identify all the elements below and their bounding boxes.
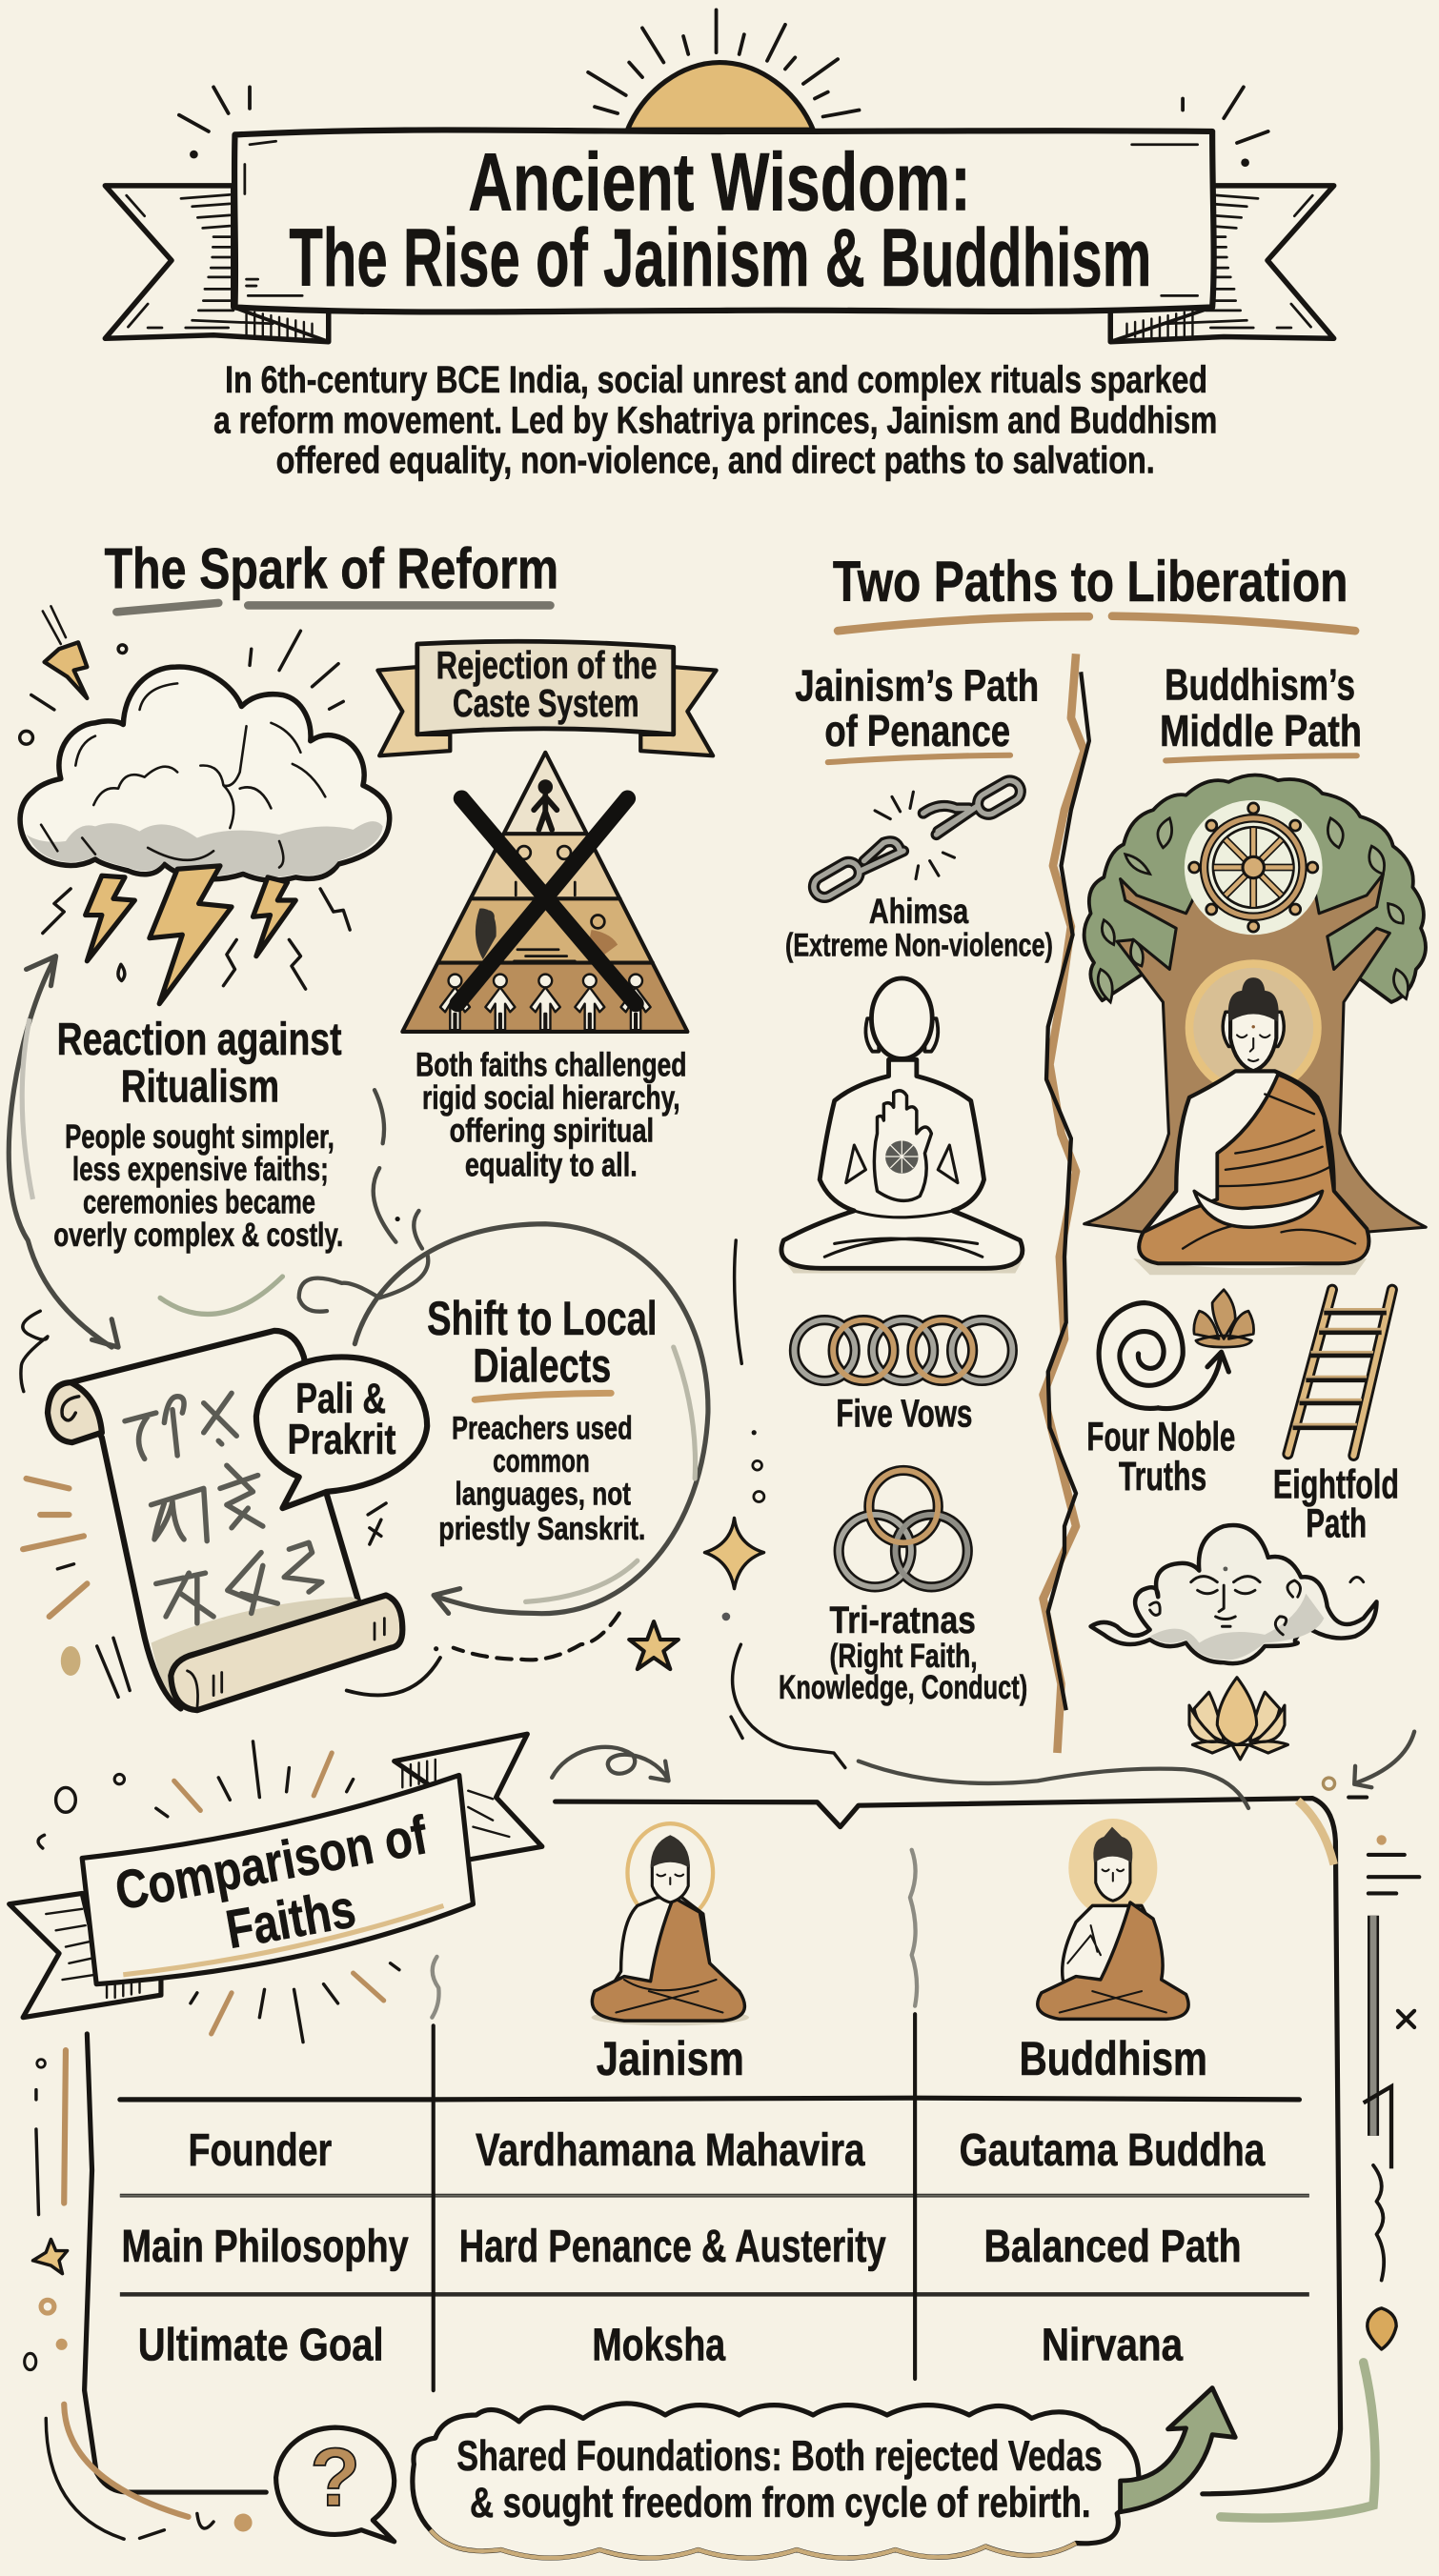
table text: founder row: Founder [189,2124,332,2176]
icon: five vows interlinked rings [794,1320,1012,1435]
text: both faiths challenged: Both faiths challenged [415,1047,687,1084]
callout: shared foundations cloud: & sought freedom from cycle of rebirth. [470,2479,1091,2526]
label: eightfold path: Path [1306,1500,1367,1545]
decorative rays around comparison banner [38,1741,399,2043]
icon: eightfold path ladder [1287,1290,1392,1456]
icon: five vows interlinked rings: Five Vows [836,1391,972,1435]
icon: tri-ratnas three rings [779,1470,1027,1706]
panel: shift to local dialects speech circle: Preachers used [452,1411,633,1447]
title text: Ancient Wisdom: [468,137,971,229]
label: four noble truths [1086,1415,1235,1499]
arrow: ritualism to scroll [9,956,118,1347]
banner: rejection of the caste system [377,641,717,755]
table text: main philosophy row: Balanced Path [984,2221,1242,2272]
column heading: Jainism's Path of Penance [795,660,1039,762]
icon: lotus [1189,1678,1287,1760]
table text: ultimate goal row: Nirvana [1042,2320,1184,2371]
text: reaction against ritualism: ceremonies became [83,1184,315,1221]
table text: ultimate goal row: Moksha [592,2320,726,2371]
panel: shift to local dialects speech circle [355,1224,708,1614]
figure: Jain meditator with hand symbol [781,978,1023,1273]
text: reaction against ritualism [53,1014,343,1254]
panel: shift to local dialects speech circle: common [493,1443,590,1479]
table text: main philosophy row: Hard Penance & Austerity [459,2221,886,2272]
title banner ribbon [105,130,1334,342]
column heading: Buddhism's Middle Path [1160,660,1362,760]
text: both faiths challenged: rigid social hierarchy, [422,1079,680,1117]
table text: founder row: Gautama Buddha [960,2124,1266,2176]
callout: shared foundations cloud: Shared Foundations: Both rejected Vedas [456,2432,1103,2480]
column heading: Buddhism's Middle Path: Buddhism’s [1165,660,1355,710]
label: Ahimsa: Ahimsa [869,891,968,931]
arrow: green upward arrow [1121,2388,1235,2512]
icon: scroll of scripts [48,1331,402,1710]
intro paragraph: a reform movement. Led by Kshatriya princes, Jainism and Buddhism [213,399,1217,441]
text: reaction against ritualism: People sought simpler, [65,1118,334,1156]
icon: rising sun with rays [179,10,1268,167]
figure: small Jain seated figure [592,1823,749,2025]
column heading: Jainism's Path of Penance: of Penance [824,706,1010,755]
text: both faiths challenged [415,1047,687,1184]
heading: The Spark of Reform: The Spark of Reform [104,535,558,600]
icon: tri-ratnas three rings: Tri-ratnas [829,1600,976,1641]
callout: shared foundations cloud [413,2404,1139,2558]
text: both faiths challenged: equality to all. [465,1147,638,1184]
text: both faiths challenged: offering spiritual [450,1113,654,1150]
column heading: Buddhism's Middle Path: Middle Path [1160,706,1362,755]
table text: ultimate goal row [138,2320,1184,2371]
table grid lines [120,1850,1309,2390]
icon: question speech bubble: ? [310,2432,360,2524]
comparison table frame [85,1761,1341,2494]
table text: founder row: Vardhamana Mahavira [476,2124,865,2176]
text: reaction against ritualism: less expensive faiths; [72,1151,329,1188]
banner: comparison of faiths [10,1734,542,2018]
table text: main philosophy row [122,2221,1242,2272]
icon: spiral to lotus (four noble truths) [1099,1290,1254,1409]
label: four noble truths: Truths [1119,1454,1206,1499]
figure: small Buddha seated figure [1038,1819,1188,2019]
speech bubble: Pali & Prakrit: Prakrit [288,1416,395,1463]
decorative marks around scroll [23,1240,845,1768]
title text [289,137,1151,304]
icon: question speech bubble [276,2427,395,2542]
text: reaction against ritualism: Reaction against [57,1014,342,1065]
table text: header row [597,2032,1207,2085]
figure: meditating Buddha [1133,960,1368,1275]
intro paragraph: offered equality, non-violence, and direct paths to salvation. [276,440,1155,482]
label: four noble truths: Four Noble [1086,1415,1235,1459]
icon: tri-ratnas three rings: (Right Faith, [829,1638,978,1675]
panel: shift to local dialects speech circle: languages, not [455,1477,631,1513]
label: eightfold path [1273,1462,1399,1545]
connector squiggles [21,1090,428,1392]
label: Ahimsa: (Extreme Non-violence) [785,928,1053,964]
divider between Jainism and Buddhism [1044,654,1089,1753]
table text: header row: Jainism [597,2032,744,2085]
illustration: bodhi tree with dharma wheel [1084,775,1426,1232]
intro paragraph [213,359,1217,482]
table text: ultimate goal row: Ultimate Goal [138,2320,384,2371]
text: reaction against ritualism: overly complex & costly. [53,1217,343,1254]
text: reaction against ritualism: Ritualism [121,1060,279,1112]
panel: shift to local dialects speech circle: Shift to Local [427,1292,657,1345]
banner: comparison of faiths: Faiths [221,1878,360,1961]
icon: tri-ratnas three rings: Knowledge, Conduct) [779,1669,1027,1706]
column heading: Jainism's Path of Penance: Jainism’s Path [795,660,1039,710]
pyramid with crossed-out caste hierarchy [402,753,687,1032]
table text: main philosophy row: Main Philosophy [122,2221,409,2272]
icon: broken chain [810,776,1024,901]
panel: shift to local dialects speech circle: priestly Sanskrit. [438,1511,645,1547]
panel: shift to local dialects speech circle: Dialects [473,1338,611,1392]
icon: storm cloud with lightning [20,606,390,1004]
decorative marks on right margin [1221,1732,1419,2518]
arrow: loop [552,1747,669,1781]
banner: rejection of the caste system: Caste System [453,681,639,725]
table text: founder row [189,2124,1266,2176]
intro paragraph: In 6th-century BCE India, social unrest and complex rituals sparked [225,359,1207,401]
label: Ahimsa [785,891,1053,964]
banner: comparison of faiths: Comparison of [111,1804,433,1922]
speech bubble: Pali & Prakrit [256,1357,427,1508]
decorative marks on left margin [25,2050,253,2539]
banner: rejection of the caste system: Rejection of the [436,643,657,687]
table text: header row: Buddhism [1020,2032,1207,2085]
speech bubble: Pali & Prakrit: Pali & [295,1375,386,1422]
illustration: peaceful cloud face [1091,1525,1376,1663]
